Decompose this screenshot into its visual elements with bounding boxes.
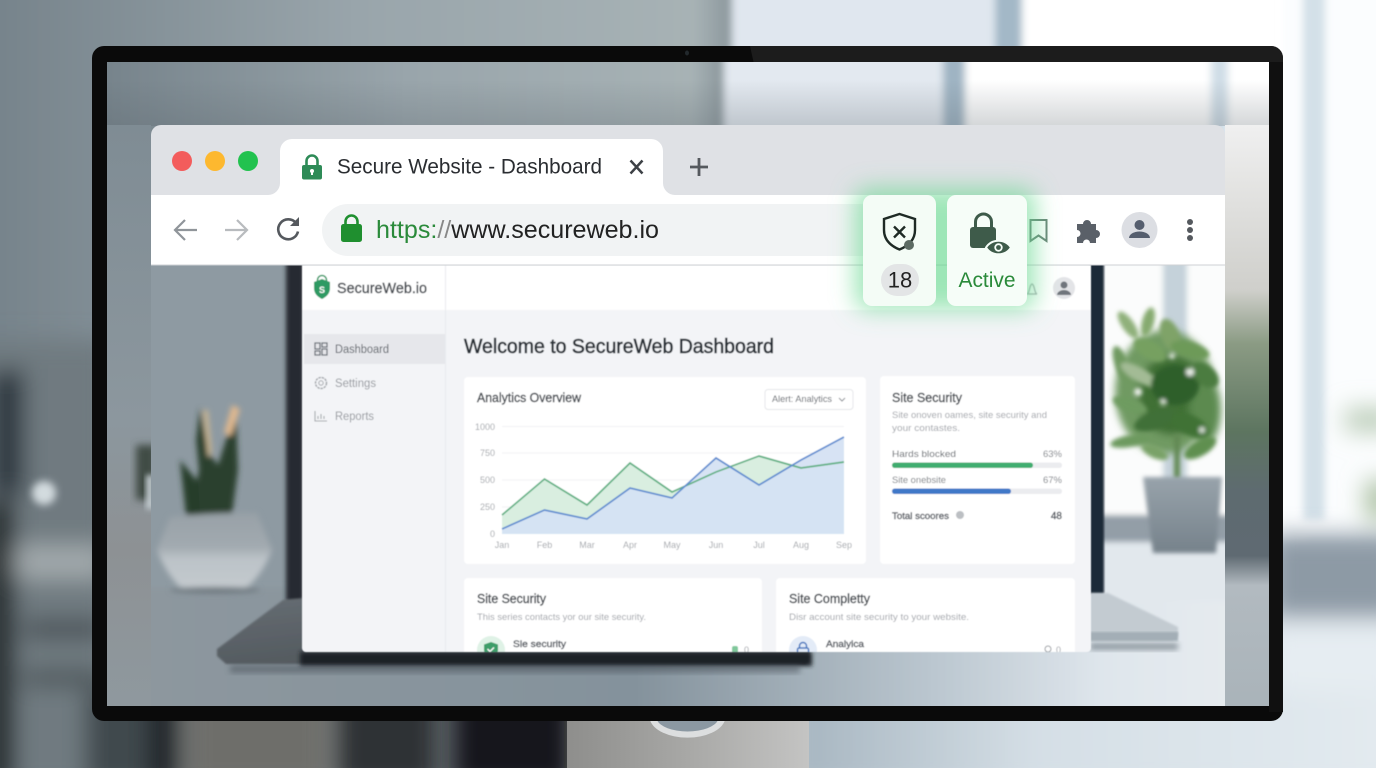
window background [1095, 260, 1235, 543]
panel: site security list [464, 578, 762, 653]
frosted strip left [107, 125, 151, 706]
active tab: Secure Website - Dashboard [337, 156, 602, 178]
shield icon [884, 214, 915, 250]
address lock [341, 216, 362, 242]
browser chrome [151, 125, 1225, 266]
lock with eye icon [970, 214, 1011, 254]
area chart: Mar [579, 540, 595, 550]
brand name: SecureWeb.io [337, 281, 427, 297]
area chart: 1000 [475, 422, 495, 432]
tab strip [151, 125, 1225, 195]
menu: dashboard [315, 343, 389, 356]
profile avatar [1122, 212, 1158, 248]
screen wallpaper [90, 50, 1278, 715]
progress: site onebsite [892, 475, 1063, 494]
panel: analytics overview: Analytics Overview [477, 391, 582, 405]
logo [314, 276, 330, 299]
area chart: 250 [480, 502, 495, 512]
address bar: https://www.secureweb.io [376, 216, 659, 244]
laptop left base [217, 598, 812, 673]
panel: site security stats [880, 376, 1075, 564]
browser viewport photo [145, 258, 1235, 713]
menu: settings: Settings [335, 378, 376, 390]
reload [278, 217, 299, 239]
extensions puzzle [1077, 220, 1100, 243]
vase [157, 513, 272, 590]
active tab [268, 139, 675, 195]
total scores: Total scoores [892, 511, 949, 522]
total scores [892, 510, 1062, 520]
progress: hards blocked: Hards blocked [892, 449, 956, 460]
green glow [855, 188, 1035, 310]
area chart: Aug [793, 540, 809, 550]
laptop right base [1090, 593, 1178, 650]
stand ring [650, 720, 725, 738]
foliage mass [1115, 330, 1221, 454]
shield badge [476, 636, 506, 653]
panel: site security list: This series contacts yor our site security. [477, 612, 646, 623]
dashboard header [302, 265, 1091, 310]
laptop right bezel [1089, 260, 1104, 594]
logo: S [319, 285, 325, 295]
frosted strip right [1225, 125, 1269, 706]
area chart: Apr [623, 540, 637, 550]
panel: site security list: Site Security [477, 592, 547, 606]
panel: site completly list: Site Completty [789, 592, 871, 606]
total scores: 48 [1051, 511, 1062, 522]
new tab plus [690, 158, 708, 176]
leaves [180, 405, 240, 515]
progress: site onebsite: 67% [1043, 475, 1063, 486]
panel: analytics overview [464, 377, 866, 564]
badge: active [947, 195, 1027, 306]
menu: settings [316, 378, 376, 390]
count pill: 18 [888, 268, 912, 292]
area chart: 0 [490, 529, 495, 539]
panel: site completly list [776, 578, 1074, 653]
bookmark [1030, 220, 1046, 241]
area chart: May [663, 540, 681, 550]
badge: blocked count [863, 195, 936, 306]
badge: active: Active [958, 269, 1016, 292]
menu: reports [315, 411, 374, 423]
dashboard screenshot [302, 265, 1091, 664]
forward arrow [225, 220, 247, 240]
sidebar [304, 266, 446, 423]
monitor stand [567, 718, 809, 768]
right plant [1109, 306, 1224, 553]
dropdown: Alert: Analytics [772, 394, 832, 405]
area chart [475, 422, 852, 550]
panel: site completly list: Disr account site security to your website. [789, 612, 969, 623]
laptop [217, 258, 1178, 673]
back arrow [175, 220, 197, 240]
progress: hards blocked [892, 449, 1063, 468]
menu dots [1187, 219, 1193, 241]
header bell and avatar [1027, 277, 1075, 299]
menu: reports: Reports [335, 411, 374, 423]
panel: site security stats: Site onoven oames, site security and [892, 410, 1047, 421]
foliage [1109, 306, 1224, 479]
panel: site completly list: Analyica [826, 639, 865, 650]
camera [685, 50, 689, 56]
panel: site completly list: 0 [1056, 645, 1061, 655]
panel: site security stats: your contastes. [892, 423, 960, 434]
panel: site security list: 0 [744, 645, 749, 655]
area chart: Jan [495, 540, 509, 550]
window controls [172, 151, 258, 171]
pot [1143, 477, 1222, 553]
lock badge [788, 636, 818, 653]
left plant [157, 405, 272, 593]
tab lock icon [302, 156, 322, 180]
address bar [322, 204, 902, 256]
progress: hards blocked: 63% [1043, 449, 1063, 460]
area chart: Jun [709, 540, 723, 550]
panel: site security list: Sle security [513, 639, 566, 650]
tab close [630, 160, 642, 174]
area chart: Feb [537, 540, 552, 550]
monitor bezel [92, 46, 1283, 721]
menu: dashboard: Dashboard [335, 344, 389, 356]
area chart: 750 [480, 448, 495, 458]
area chart: Sep [836, 540, 852, 550]
laptop left bezel [286, 258, 304, 602]
progress: site onebsite: Site onebsite [892, 475, 946, 486]
welcome heading: Welcome to SecureWeb Dashboard [464, 336, 774, 358]
toolbar [151, 195, 1225, 265]
area chart: Jul [753, 540, 765, 550]
desk surface [145, 588, 1235, 713]
dropdown [765, 390, 853, 410]
extension badges [855, 188, 1035, 310]
area chart: 500 [480, 475, 495, 485]
panel: site security stats: Site Security [892, 391, 963, 405]
